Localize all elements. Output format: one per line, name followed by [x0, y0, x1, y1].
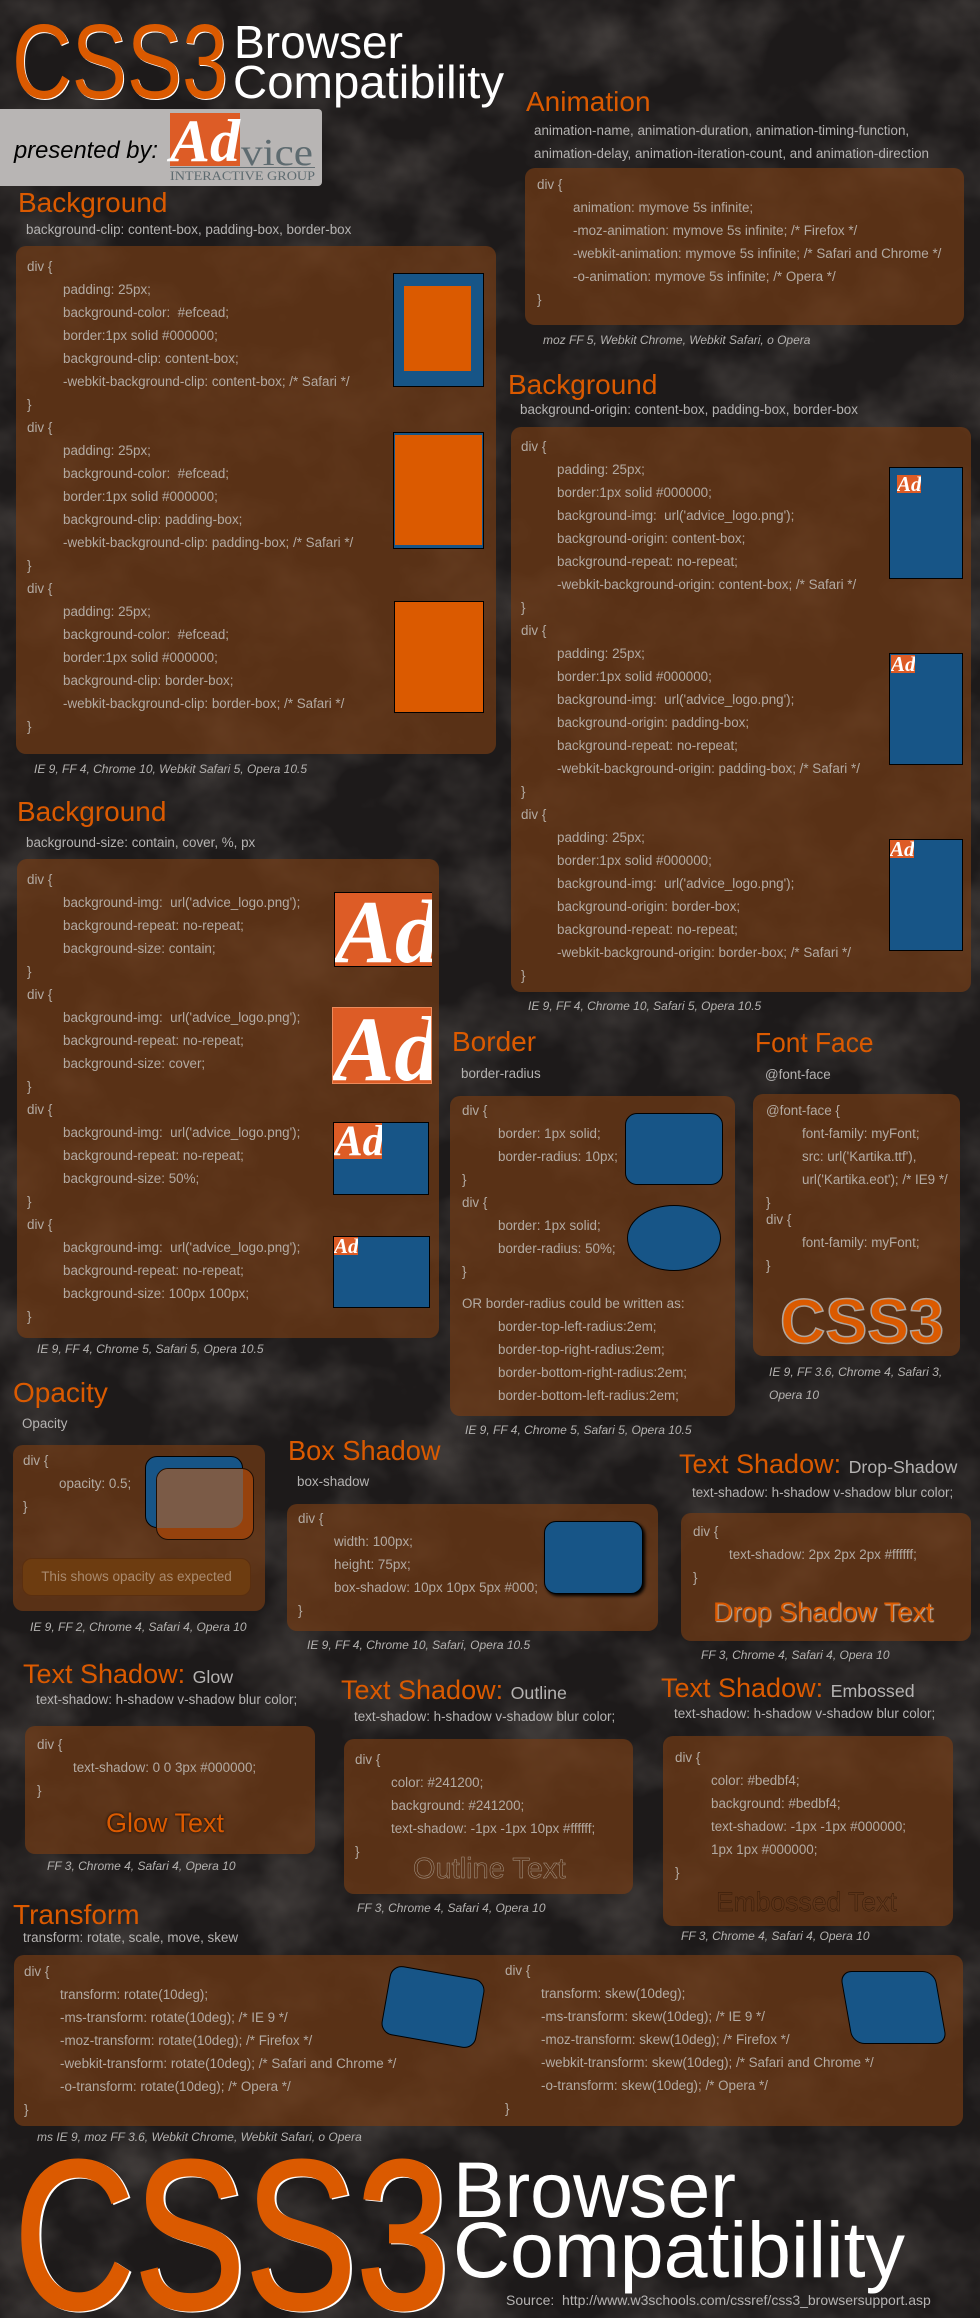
code: background-size: div {: [27, 1102, 52, 1117]
presented by banner with logo: presented by:: [13, 137, 158, 164]
code: glow: [37, 1737, 256, 1798]
heading: Font Face: Font Face: [755, 1027, 873, 1058]
code: rotate: -ms-transform: rotate(10deg); /* IE 9 */: [60, 2010, 288, 2025]
code: background-clip: div {: [27, 581, 52, 596]
code: background-origin: background-repeat: no-repeat;: [557, 738, 738, 753]
code: rotate: -o-transform: rotate(10deg); /* Opera */: [60, 2079, 291, 2094]
code: border: border-bottom-right-radius:2em;: [498, 1365, 687, 1380]
code: rotate: }: [24, 2102, 28, 2117]
heading: Text Shadow Outline: Text Shadow: Outline: [341, 1675, 567, 1705]
code: skew: -o-transform: skew(10deg); /* Opera */: [541, 2078, 768, 2093]
code: opacity: opacity: 0.5;: [59, 1476, 131, 1491]
panel: transform: [14, 1955, 963, 2126]
code: animation: [537, 177, 942, 307]
code: background-clip: background-color: #efcead;: [63, 466, 229, 481]
code: border: div {: [462, 1103, 487, 1118]
browser support: drop shadow: FF 3, Chrome 4, Safari 4, Opera 10: [701, 1648, 890, 1662]
panel: box shadow: [287, 1504, 658, 1631]
heading: Background (origin): Background: [508, 369, 657, 400]
code: font face: src: url('Kartika.ttf'),: [802, 1149, 916, 1164]
code: background-size: background-size: contain;: [63, 941, 216, 956]
code: border: }: [462, 1172, 466, 1187]
example: border-box clip: [394, 601, 484, 713]
code: background-size: background-repeat: no-repeat;: [63, 918, 244, 933]
code: glow: div {: [37, 1737, 62, 1752]
panel: animation: [525, 168, 964, 325]
code: background-origin: background-repeat: no-repeat;: [557, 922, 738, 937]
code: opacity: }: [23, 1499, 27, 1514]
code: background-origin: border:1px solid #000000;: [557, 853, 712, 868]
subtitle: text-shadow outline: text-shadow: h-shadow v-shadow blur color;: [354, 1709, 615, 1724]
code: rotate: div {: [24, 1964, 49, 1979]
footer title: CSS3 Browser Compatibility: [14, 2140, 905, 2318]
heading: Opacity: Opacity: [13, 1377, 108, 1408]
code: font face: url('Kartika.eot'); /* IE9 */: [802, 1172, 948, 1187]
browser support: border: IE 9, FF 4, Chrome 5, Safari 5, Opera 10.5: [465, 1423, 692, 1437]
code: embossed: 1px 1px #000000;: [711, 1842, 817, 1857]
example: origin content-box: [889, 467, 963, 579]
code: animation: -o-animation: mymove 5s infinite; /* Opera */: [573, 269, 836, 284]
panel: border: [450, 1096, 735, 1416]
code: rotate: -webkit-transform: rotate(10deg); /* Safari and Chrome */: [60, 2056, 396, 2071]
panel: font face: [753, 1094, 960, 1356]
example: rounded rectangle: [625, 1113, 723, 1185]
code: background-origin: [521, 439, 860, 983]
code: background-origin: -webkit-background-origin: content-box; /* Safari */: [557, 577, 856, 592]
code: box shadow: box-shadow: 10px 10px 5px #000;: [334, 1580, 538, 1595]
code: background-size: [27, 872, 300, 1324]
source line: Source: http://www.w3schools.com/cssref/css3_browsersupport.asp: [506, 2292, 931, 2308]
code: font face: div {: [766, 1212, 791, 1227]
code: background-origin: div {: [521, 623, 546, 638]
sample: glow text: Glow Text: [106, 1808, 224, 1838]
code: outline: text-shadow: -1px -1px 10px #ffffff;: [391, 1821, 595, 1836]
code: animation: }: [537, 292, 541, 307]
code: background-clip: background-clip: border-box;: [63, 673, 233, 688]
example: origin border-box: [889, 839, 963, 951]
code: background-origin: border:1px solid #000000;: [557, 669, 712, 684]
example: ellipse: [627, 1205, 721, 1271]
code: background-clip: border:1px solid #000000;: [63, 328, 218, 343]
browser support: background-clip: IE 9, FF 4, Chrome 10, Webkit Safari 5, Opera 10.5: [34, 762, 307, 776]
code: background-size: background-repeat: no-repeat;: [63, 1033, 244, 1048]
subtitle: @font-face: @font-face: [765, 1067, 831, 1082]
code: drop shadow: div {: [693, 1524, 718, 1539]
panel: drop shadow: [681, 1513, 971, 1641]
code: outline: [355, 1752, 595, 1859]
panel: background-origin: [511, 427, 971, 992]
example: translucent orange box: [156, 1468, 254, 1540]
code: opacity: [23, 1453, 131, 1514]
panel: glow: [25, 1726, 315, 1854]
example: blue box: [145, 1456, 243, 1528]
code: background-size: }: [27, 1079, 31, 1094]
panel: outline: [344, 1739, 633, 1894]
code: drop shadow: text-shadow: 2px 2px 2px #ffffff;: [729, 1547, 917, 1562]
title: CSS3 Browser Compatibility: Compatibility: [233, 56, 504, 108]
code: background-size: div {: [27, 987, 52, 1002]
code: background-clip: border:1px solid #000000;: [63, 489, 218, 504]
code: font face: font-family: myFont;: [802, 1235, 920, 1250]
subtitle: background-clip: background-clip: content-box, padding-box, border-box: [26, 222, 351, 237]
code: skew: [505, 1963, 874, 2116]
heading: Text Shadow Drop-Shadow: Text Shadow: Drop-Shadow: [679, 1449, 957, 1479]
code: background-origin: -webkit-background-origin: padding-box; /* Safari */: [557, 761, 860, 776]
code: box shadow: }: [298, 1603, 302, 1618]
code: background-clip: background-color: #efcead;: [63, 305, 229, 320]
code: opacity: div {: [23, 1453, 48, 1468]
code: skew: -ms-transform: skew(10deg); /* IE 9 */: [541, 2009, 765, 2024]
code: box shadow: height: 75px;: [334, 1557, 411, 1572]
presented by banner with logo: [0, 109, 322, 186]
heading: Border: Border: [452, 1026, 536, 1057]
heading: Background (size): Background: [17, 796, 166, 827]
subtitle: text-shadow embossed: text-shadow: h-shadow v-shadow blur color;: [674, 1706, 935, 1721]
code: border: OR border-radius could be written as:: [462, 1296, 685, 1311]
code: background-clip: background-clip: padding-box;: [63, 512, 242, 527]
code: font face: }: [766, 1195, 770, 1210]
presented by banner with logo: INTERACTIVE GROUP: [170, 168, 315, 183]
code: background-size: background-img: url('advice_logo.png');: [63, 1125, 300, 1140]
browser support: outline: FF 3, Chrome 4, Safari 4, Opera 10: [357, 1901, 546, 1915]
code: skew: }: [505, 2101, 509, 2116]
code: outline: color: #241200;: [391, 1775, 483, 1790]
heading: Text Shadow Embossed: Text Shadow: Embossed: [661, 1673, 915, 1703]
code: background-size: div {: [27, 1217, 52, 1232]
code: background-clip: }: [27, 397, 31, 412]
browser support: font face: Opera 10: [769, 1388, 819, 1402]
heading: Box Shadow: Box Shadow: [288, 1435, 441, 1466]
code: font face: font-family: myFont;: [802, 1126, 920, 1141]
code: rotate: [24, 1964, 396, 2117]
code: background-origin: background-repeat: no-repeat;: [557, 554, 738, 569]
browser support: background-size: IE 9, FF 4, Chrome 5, Safari 5, Opera 10.5: [37, 1342, 264, 1356]
browser support: glow: FF 3, Chrome 4, Safari 4, Opera 10: [47, 1859, 236, 1873]
code: background-clip: div {: [27, 259, 52, 274]
subtitle: animation properties: animation-name, animation-duration, animation-timing-function,: [534, 123, 909, 138]
code: embossed: [675, 1750, 906, 1880]
code: border: border-top-right-radius:2em;: [498, 1342, 665, 1357]
code: background-origin: div {: [521, 807, 546, 822]
heading: Background (clip): Background: [18, 187, 167, 218]
browser support: font face: [769, 1365, 942, 1402]
code: background-origin: background-img: url('advice_logo.png');: [557, 692, 794, 707]
browser support: opacity: IE 9, FF 2, Chrome 4, Safari 4, Opera 10: [30, 1620, 247, 1634]
code: background-origin: background-origin: border-box;: [557, 899, 740, 914]
code: background-size: background-img: url('advice_logo.png');: [63, 895, 300, 910]
subtitle: animation properties: [534, 123, 929, 161]
code: background-size: background-size: 50%;: [63, 1171, 199, 1186]
code: background-size: background-img: url('advice_logo.png');: [63, 1240, 300, 1255]
footer title: CSS3 Browser Compatibility: Compatibility: [453, 2205, 905, 2294]
code: background-size: }: [27, 1309, 31, 1324]
code: background-size: background-repeat: no-repeat;: [63, 1263, 244, 1278]
code: embossed: }: [675, 1865, 679, 1880]
code: background-size: background-img: url('advice_logo.png');: [63, 1010, 300, 1025]
browser support: animation: moz FF 5, Webkit Chrome, Webkit Safari, o Opera: [543, 333, 810, 347]
code: background-clip: -webkit-background-clip: content-box; /* Safari */: [63, 374, 350, 389]
code: background-origin: }: [521, 600, 525, 615]
code: border: border-radius: 10px;: [498, 1149, 618, 1164]
presented by banner with logo: vice: [241, 132, 313, 174]
browser support: transform: ms IE 9, moz FF 3.6, Webkit Chrome, Webkit Safari, o Opera: [37, 2130, 362, 2144]
title: CSS3 Browser Compatibility: Browser: [234, 16, 403, 68]
code: background-size: background-repeat: no-repeat;: [63, 1148, 244, 1163]
sample: drop shadow text: Drop Shadow Text: [713, 1597, 933, 1627]
code: background-origin: background-origin: content-box;: [557, 531, 745, 546]
code: box shadow: width: 100px;: [334, 1534, 413, 1549]
heading: Animation: Animation: [526, 86, 651, 117]
code: box shadow: div {: [298, 1511, 323, 1526]
button: opacity note: This shows opacity as expected: [41, 1569, 232, 1584]
code: embossed: div {: [675, 1750, 700, 1765]
code: background-clip: }: [27, 719, 31, 734]
code: animation: animation: mymove 5s infinite;: [573, 200, 753, 215]
code: border: div {: [462, 1195, 487, 1210]
title: CSS3 Browser Compatibility: [12, 3, 504, 112]
code: background-origin: -webkit-background-origin: border-box; /* Safari */: [557, 945, 851, 960]
code: background-clip: }: [27, 558, 31, 573]
code: outline: }: [355, 1844, 359, 1859]
code: drop shadow: }: [693, 1570, 697, 1585]
code: font face: }: [766, 1258, 770, 1273]
code: embossed: color: #bedbf4;: [711, 1773, 800, 1788]
code: glow: text-shadow: 0 0 3px #000000;: [73, 1760, 256, 1775]
code: border: border-bottom-left-radius:2em;: [498, 1388, 679, 1403]
footer title: CSS3 Browser Compatibility: Browser: [453, 2145, 736, 2234]
code: drop shadow: [693, 1524, 917, 1585]
code: skew: -moz-transform: skew(10deg); /* Firefox */: [541, 2032, 790, 2047]
code: background-size: background-size: cover;: [63, 1056, 205, 1071]
code: background-origin: padding: 25px;: [557, 462, 645, 477]
code: background-clip: [27, 259, 354, 734]
code: background-origin: background-img: url('advice_logo.png');: [557, 508, 794, 523]
code: rotate: -moz-transform: rotate(10deg); /* Firefox */: [60, 2033, 312, 2048]
code: border: border-top-left-radius:2em;: [498, 1319, 657, 1334]
code: outline: div {: [355, 1752, 380, 1767]
panel: background-size: [17, 859, 439, 1338]
code: embossed: background: #bedbf4;: [711, 1796, 841, 1811]
code: background-origin: background-origin: padding-box;: [557, 715, 749, 730]
example: padding-box clip: [393, 432, 484, 549]
example: shadowed box: [544, 1521, 643, 1594]
code: border: }: [462, 1264, 466, 1279]
code: skew: transform: skew(10deg);: [541, 1986, 685, 2001]
code: animation: div {: [537, 177, 562, 192]
heading: Text Shadow Glow: Text Shadow: Glow: [23, 1659, 233, 1689]
heading: Transform: Transform: [13, 1899, 140, 1930]
subtitle: box-shadow: box-shadow: [297, 1474, 369, 1489]
subtitle: animation properties: animation-delay, animation-iteration-count, and animation-direction: [534, 146, 929, 161]
code: background-origin: div {: [521, 439, 546, 454]
code: background-size: background-size: 100px 100px;: [63, 1286, 249, 1301]
code: background-clip: div {: [27, 420, 52, 435]
code: box shadow: [298, 1511, 538, 1618]
code: font face: @font-face {: [766, 1103, 840, 1118]
code: glow: }: [37, 1783, 41, 1798]
code: background-clip: background-color: #efcead;: [63, 627, 229, 642]
code: outline: background: #241200;: [391, 1798, 524, 1813]
panel: background-clip: [16, 246, 496, 754]
browser support: font face: IE 9, FF 3.6, Chrome 4, Safari 3,: [769, 1365, 942, 1379]
presented by banner with logo: Ad: [166, 109, 241, 174]
code: background-origin: border:1px solid #000000;: [557, 485, 712, 500]
browser support: background-origin: IE 9, FF 4, Chrome 10, Safari 5, Opera 10.5: [528, 999, 761, 1013]
code: border: border: 1px solid;: [498, 1218, 601, 1233]
example: skewed box: [839, 1971, 947, 2044]
code: background-size: }: [27, 964, 31, 979]
subtitle: text-shadow drop: text-shadow: h-shadow v-shadow blur color;: [692, 1485, 953, 1500]
code: background-clip: border:1px solid #000000;: [63, 650, 218, 665]
subtitle: border-radius: border-radius: [461, 1066, 541, 1081]
browser support: box shadow: IE 9, FF 4, Chrome 10, Safari, Opera 10.5: [307, 1638, 530, 1652]
code: background-origin: background-img: url('advice_logo.png');: [557, 876, 794, 891]
code: font face: [766, 1103, 948, 1273]
code: border: border-radius: 50%;: [498, 1241, 616, 1256]
code: background-clip: padding: 25px;: [63, 604, 151, 619]
code: embossed: text-shadow: -1px -1px #000000;: [711, 1819, 906, 1834]
code: rotate: transform: rotate(10deg);: [60, 1987, 208, 2002]
panel: opacity: [13, 1445, 265, 1611]
code: background-clip: background-clip: content-box;: [63, 351, 239, 366]
subtitle: Opacity: Opacity: [22, 1416, 67, 1431]
subtitle: transform: transform: rotate, scale, move, skew: [23, 1930, 238, 1945]
subtitle: text-shadow glow: text-shadow: h-shadow v-shadow blur color;: [36, 1692, 297, 1707]
code: background-origin: padding: 25px;: [557, 830, 645, 845]
subtitle: background-size: background-size: contain, cover, %, px: [26, 835, 255, 850]
code: skew: div {: [505, 1963, 530, 1978]
code: animation: -webkit-animation: mymove 5s infinite; /* Safari and Chrome */: [573, 246, 941, 261]
code: background-clip: padding: 25px;: [63, 282, 151, 297]
code: background-origin: }: [521, 968, 525, 983]
code: background-origin: padding: 25px;: [557, 646, 645, 661]
button: opacity note: [22, 1558, 251, 1596]
example: rotated box: [379, 1964, 486, 2050]
code: background-origin: }: [521, 784, 525, 799]
example: size 100px: [333, 1236, 430, 1308]
browser support: embossed: FF 3, Chrome 4, Safari 4, Opera 10: [681, 1929, 870, 1943]
code: background-clip: -webkit-background-clip: border-box; /* Safari */: [63, 696, 344, 711]
panel: embossed: [663, 1736, 953, 1926]
code: background-size: div {: [27, 872, 52, 887]
code: background-size: }: [27, 1194, 31, 1209]
subtitle: background-origin: background-origin: content-box, padding-box, border-box: [520, 402, 858, 417]
code: background-clip: padding: 25px;: [63, 443, 151, 458]
example: origin padding-box: [889, 653, 963, 765]
code: skew: -webkit-transform: skew(10deg); /* Safari and Chrome */: [541, 2055, 874, 2070]
example: size 50%: [333, 1122, 429, 1195]
code: border: border: 1px solid;: [498, 1126, 601, 1141]
code: border: [462, 1103, 687, 1403]
code: animation: -moz-animation: mymove 5s infinite; /* Firefox */: [573, 223, 857, 238]
example: content-box clip: [393, 273, 484, 387]
code: background-clip: -webkit-background-clip: padding-box; /* Safari */: [63, 535, 353, 550]
